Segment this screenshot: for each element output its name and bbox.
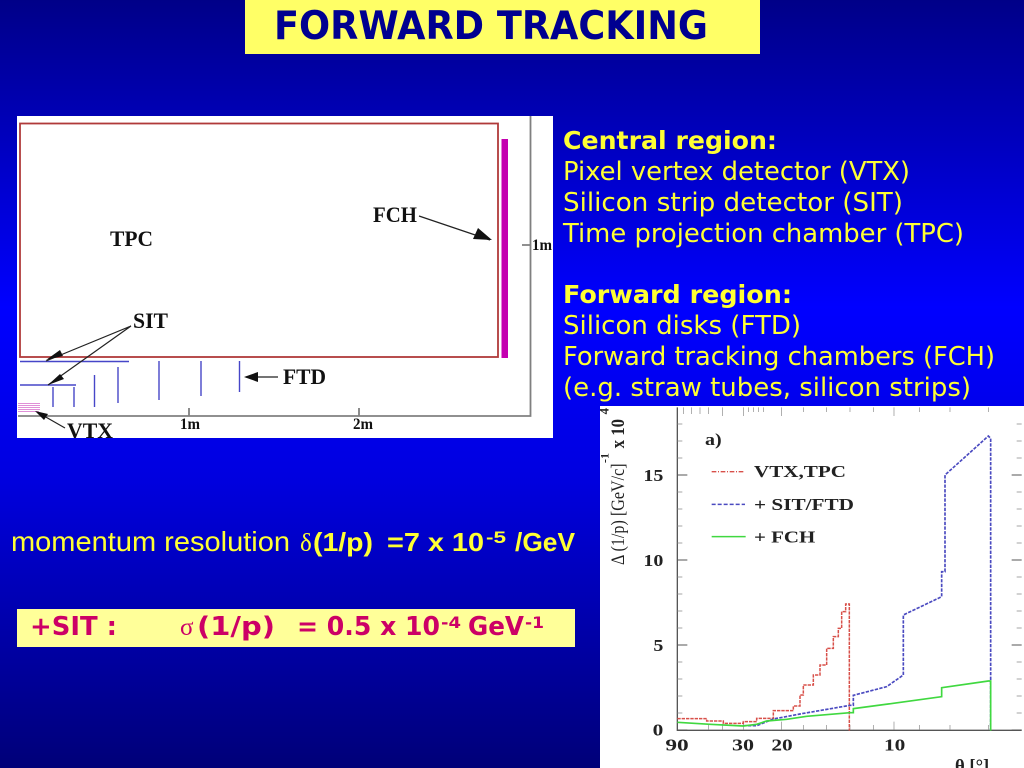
panel: detector layout diagram	[17, 116, 553, 443]
TPC outline	[20, 124, 498, 357]
text block: detector regions: Silicon disks (FTD)	[563, 311, 801, 341]
y axis title: x 10	[608, 419, 629, 448]
text block: detector regions: Forward region:	[563, 280, 792, 309]
chart legend	[705, 430, 854, 546]
diagram labels: 1m	[532, 237, 553, 254]
arrows	[35, 216, 492, 428]
chart: momentum resolution vs angle	[598, 406, 1024, 768]
callout: SIT resolution: (1/p)	[197, 612, 275, 642]
axis tick labels: 30	[732, 736, 754, 755]
y axis title: Δ (1/p) [GeV/c]	[608, 463, 629, 565]
axis tick labels: 10	[884, 736, 905, 755]
chart legend: a)	[705, 430, 722, 449]
diagram labels: TPC	[110, 226, 153, 251]
text block: detector regions: Silicon strip detector (SIT)	[563, 188, 903, 218]
diagram labels: 1m	[180, 416, 201, 433]
momentum resolution text: (1/p)	[313, 527, 373, 557]
FCH magenta bar	[502, 139, 508, 358]
axis tick labels: 20	[771, 736, 793, 755]
diagram labels: FTD	[283, 364, 326, 389]
momentum resolution text: momentum resolution	[11, 526, 290, 557]
diagram labels: 2m	[353, 416, 374, 433]
callout: SIT resolution: -1	[525, 613, 544, 632]
callout: SIT resolution: GeV	[468, 612, 524, 642]
diagram labels	[67, 202, 553, 443]
callout: SIT resolution: σ	[180, 614, 194, 641]
momentum resolution text	[11, 526, 576, 557]
text block: detector regions: Forward tracking chambers (FCH)	[563, 342, 995, 372]
curve: + FCH	[677, 681, 991, 731]
text block: detector regions: Time projection chamber (TPC)	[562, 219, 964, 249]
momentum resolution text: δ	[300, 530, 312, 557]
axis tick labels: 10	[643, 551, 663, 570]
y axis title: 4	[598, 407, 612, 414]
diagram labels: VTX	[67, 418, 113, 443]
chart legend: + FCH	[754, 527, 816, 546]
scale axes	[18, 116, 530, 416]
momentum resolution text: =7 x 10	[387, 527, 484, 557]
chart axes and ticks	[677, 407, 1022, 730]
axis tick labels: 15	[643, 466, 664, 485]
text block: detector regions: Pixel vertex detector (VTX)	[563, 157, 910, 187]
chart legend: VTX,TPC	[754, 462, 846, 481]
callout: SIT resolution: +SIT :	[30, 612, 117, 642]
y axis title: -1	[598, 453, 612, 463]
callout: SIT resolution	[17, 609, 575, 647]
chart legend: + SIT/FTD	[754, 495, 854, 514]
curve: VTX,TPC	[677, 604, 849, 731]
VTX layers	[18, 404, 40, 412]
curve: + SIT/FTD	[743, 436, 991, 730]
y axis title	[600, 408, 628, 564]
momentum resolution text: -5	[486, 528, 506, 547]
text block: detector regions: (e.g. straw tubes, silicon strips)	[563, 373, 971, 403]
axis tick labels: 0	[653, 720, 663, 739]
diagram labels: FCH	[373, 202, 417, 227]
axis tick labels: 90	[665, 736, 689, 755]
callout: SIT resolution: = 0.5 x 10	[297, 612, 440, 642]
text block: detector regions	[562, 126, 995, 403]
silicon layers and disks	[20, 361, 240, 407]
axis tick labels: 5	[653, 636, 664, 655]
axis tick labels	[643, 466, 905, 755]
diagram labels: SIT	[133, 308, 168, 333]
momentum resolution text: /GeV	[515, 527, 576, 557]
title: FORWARD TRACKING	[274, 4, 708, 49]
callout: SIT resolution: -4	[441, 613, 461, 632]
text block: detector regions: Central region:	[563, 126, 777, 155]
